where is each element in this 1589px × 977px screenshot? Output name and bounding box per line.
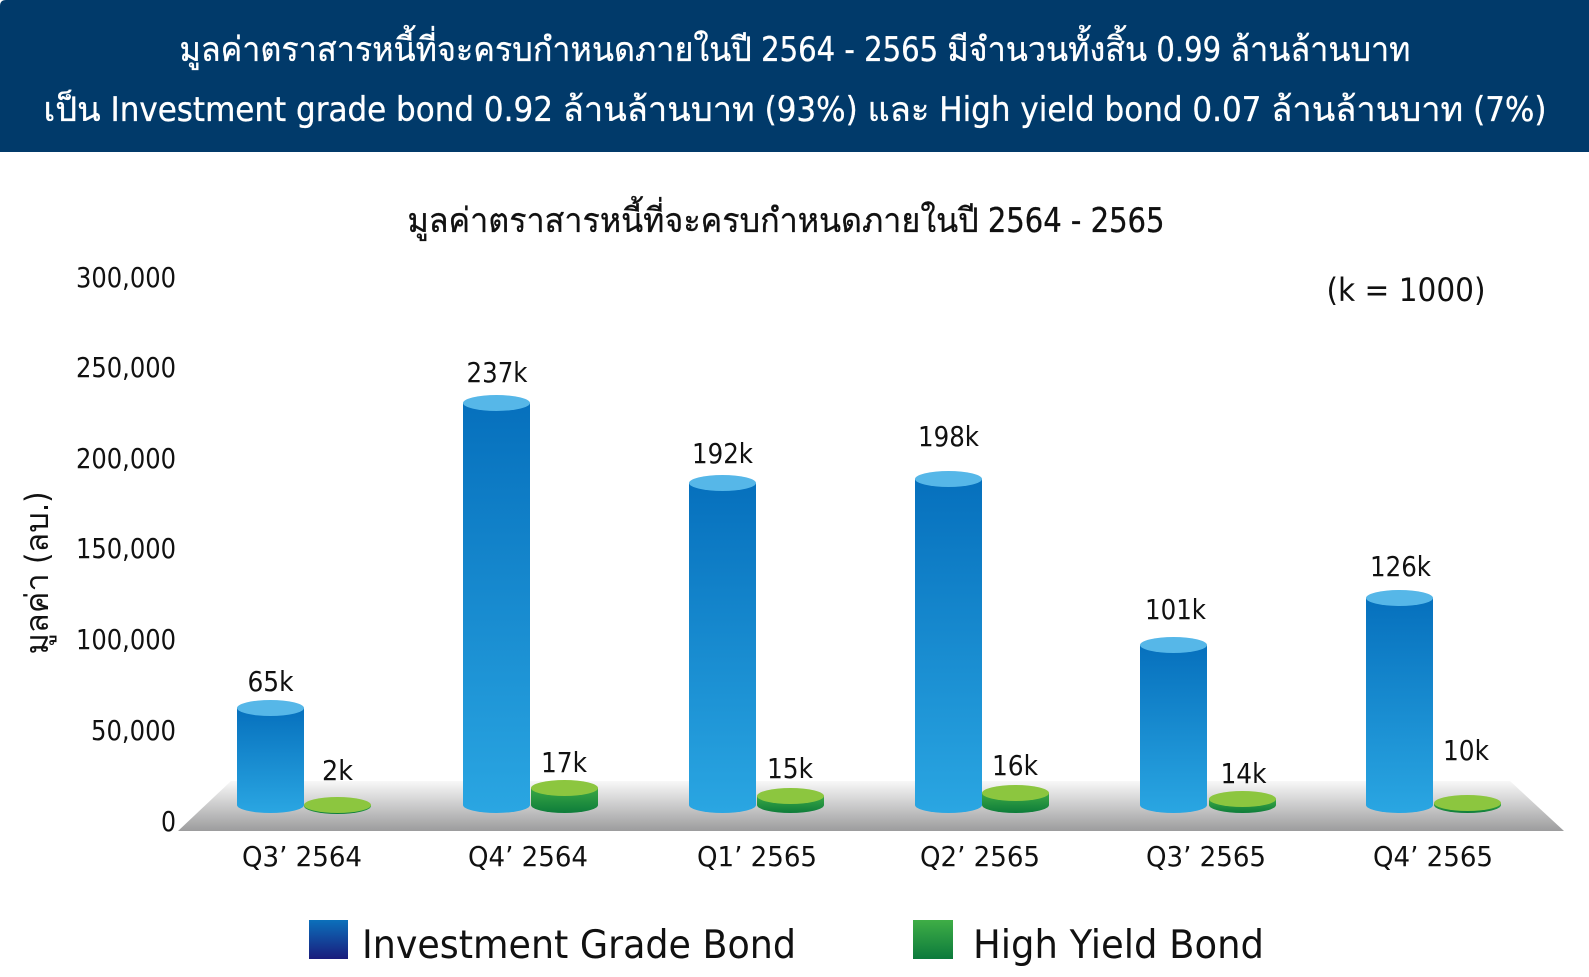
x axis labels: Q4’ 2564	[468, 840, 588, 873]
bar Q3 2564 high yield	[304, 797, 371, 814]
bar Q3 2564 investment grade	[237, 700, 304, 813]
value labels: 10k	[1443, 734, 1489, 767]
value labels: 15k	[767, 752, 813, 785]
value labels: 17k	[541, 746, 587, 779]
y axis tick labels: 150,000	[76, 532, 176, 565]
x axis labels: Q4’ 2565	[1373, 840, 1493, 873]
value labels: 14k	[1220, 757, 1267, 790]
bars: Investment Grade Bond	[237, 395, 1433, 813]
value labels: 16k	[992, 749, 1038, 782]
bar Q4 2564 high yield	[531, 780, 598, 813]
y axis tick labels: 50,000	[91, 714, 176, 747]
y axis tick labels: 250,000	[76, 351, 176, 384]
value labels: 237k	[466, 356, 528, 389]
x axis labels: Q1’ 2565	[697, 840, 817, 873]
chart title: มูลค่าตราสารหนี้ที่จะครบกำหนดภายในปี 2564 - 2565	[408, 196, 1164, 241]
x axis labels: Q2’ 2565	[920, 840, 1040, 873]
header banner	[0, 0, 1589, 152]
y axis tick labels	[76, 261, 176, 838]
y axis tick labels: 200,000	[76, 442, 176, 475]
bar Q2 2565 investment grade	[915, 471, 982, 813]
bar Q2 2565 high yield	[982, 785, 1049, 813]
bars: High Yield Bond	[304, 780, 1501, 814]
value labels: 101k	[1145, 593, 1206, 626]
y axis title: มูลค่า (ลบ.)	[18, 492, 57, 654]
header line 1: มูลค่าตราสารหนี้ที่จะครบกำหนดภายในปี 2564 - 2565 มีจำนวนทั้งสิ้น 0.99 ล้านล้านบาท	[180, 25, 1410, 70]
bar Q3 2565 high yield	[1209, 791, 1276, 813]
legend swatch investment grade	[309, 920, 348, 959]
x axis labels: Q3’ 2565	[1146, 840, 1266, 873]
bar Q4 2565 high yield	[1434, 795, 1501, 813]
header line 2: เป็น Investment grade bond 0.92 ล้านล้านบาท (93%) และ High yield bond 0.07 ล้านล้านบาท (7%)	[44, 89, 1546, 130]
value labels: 192k	[692, 437, 753, 470]
value labels	[248, 356, 1489, 790]
bar Q4 2565 investment grade	[1366, 590, 1433, 813]
bar Q1 2565 high yield	[757, 788, 824, 813]
legend label investment grade: Investment Grade Bond	[362, 923, 796, 968]
x axis labels: Q3’ 2564	[242, 840, 362, 873]
value labels: 198k	[918, 420, 979, 453]
value labels: 2k	[322, 754, 353, 787]
y axis tick labels: 0	[161, 805, 176, 838]
floor plane	[178, 781, 1564, 831]
value labels: 126k	[1370, 550, 1431, 583]
legend	[309, 920, 1264, 968]
value labels: 65k	[248, 665, 294, 698]
legend label high yield: High Yield Bond	[973, 923, 1264, 968]
legend swatch high yield	[913, 920, 953, 959]
x axis labels	[242, 840, 1493, 873]
bar Q1 2565 investment grade	[689, 475, 756, 813]
y axis tick labels: 100,000	[76, 623, 176, 656]
bar Q4 2564 investment grade	[463, 395, 530, 813]
bar Q3 2565 investment grade	[1140, 637, 1207, 813]
y axis tick labels: 300,000	[76, 261, 176, 294]
unit note: (k = 1000)	[1326, 271, 1486, 309]
